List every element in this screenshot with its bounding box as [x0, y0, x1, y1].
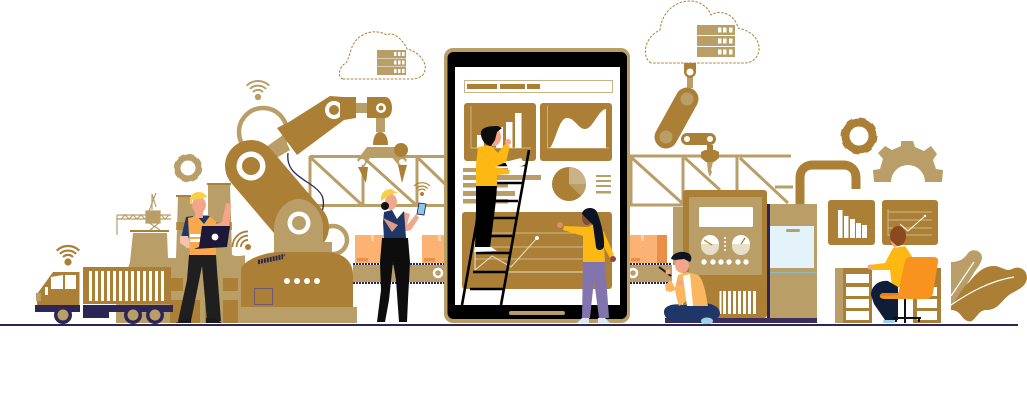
hand	[505, 139, 511, 145]
bar chart card	[464, 103, 536, 161]
ladder	[462, 150, 529, 305]
phone	[417, 203, 426, 215]
chair base	[893, 299, 921, 323]
server stack	[377, 50, 406, 75]
text lines left	[463, 168, 541, 204]
server stack	[697, 25, 735, 57]
tablet	[444, 48, 630, 323]
navy cable	[288, 153, 324, 212]
head	[890, 226, 906, 246]
shoulder joint	[274, 199, 332, 258]
search bar	[464, 80, 612, 92]
button row	[701, 259, 749, 265]
jacket	[665, 272, 708, 306]
icon: gear left	[175, 155, 201, 181]
icon: wifi beside robot	[229, 228, 258, 257]
icon: half gear tan	[873, 141, 943, 182]
sweater	[476, 144, 510, 186]
upper arm	[277, 96, 356, 155]
laptop	[194, 226, 230, 249]
shoe	[701, 318, 713, 324]
area chart card	[540, 103, 612, 161]
cabinet with pipe	[665, 165, 856, 323]
line chart panel	[882, 200, 938, 245]
delivery truck	[35, 267, 173, 324]
white gap under arm	[233, 233, 275, 256]
cloud right with server	[645, 1, 759, 63]
head	[675, 257, 689, 273]
head	[385, 194, 397, 210]
right truss frame	[630, 156, 793, 205]
trousers	[377, 238, 410, 322]
bar chart panel	[828, 200, 875, 245]
vent stripes	[720, 291, 756, 314]
shoe	[883, 320, 895, 323]
woman with phone	[377, 183, 430, 322]
robot arm	[233, 96, 357, 323]
ground line	[0, 324, 1018, 326]
hand	[868, 264, 872, 270]
control panel machine	[673, 190, 767, 318]
icon: wifi above phone	[414, 183, 430, 196]
sleeves and left arm	[181, 216, 195, 238]
truck chassis and wheels	[35, 305, 173, 324]
icon: wifi above truck	[57, 246, 79, 266]
top	[383, 210, 406, 238]
gauges	[701, 235, 750, 255]
legs	[178, 255, 221, 321]
trousers	[871, 281, 898, 320]
helmet	[381, 189, 399, 201]
shirt	[683, 274, 693, 306]
cloud left with server	[339, 32, 425, 79]
man at desk on chair	[868, 226, 938, 323]
clipboard	[505, 158, 525, 169]
pie chart	[552, 167, 586, 201]
head	[195, 208, 203, 218]
tower crane	[117, 193, 171, 235]
truck trailer	[83, 267, 171, 304]
lower arm	[236, 152, 303, 227]
vest	[188, 216, 216, 255]
left conveyor belt	[353, 264, 445, 283]
top	[563, 223, 614, 262]
worker with laptop	[176, 192, 231, 323]
tan rings behind arm	[239, 108, 347, 254]
robotic claw	[340, 97, 408, 183]
person on ladder	[474, 126, 525, 252]
sweater	[869, 246, 913, 287]
shoes	[577, 318, 589, 323]
desk with drawers	[835, 268, 941, 323]
head	[487, 128, 501, 146]
hands	[557, 222, 563, 228]
icon: gear dark	[842, 119, 876, 153]
truck cab	[36, 272, 80, 306]
man sitting on floor with phone	[659, 252, 720, 324]
girl pointing at chart	[557, 208, 616, 323]
chair	[880, 257, 938, 299]
shoe	[474, 247, 497, 252]
trousers	[475, 186, 497, 248]
helmet	[190, 192, 207, 204]
factory building with chimneys	[116, 183, 245, 323]
pie legend lines	[596, 175, 611, 194]
head and hair	[582, 211, 592, 225]
cardboard boxes on left conveyor	[355, 235, 444, 263]
legs	[664, 303, 720, 322]
left truss frame	[310, 156, 445, 206]
hanging robot arm	[660, 63, 719, 177]
robot base	[238, 252, 357, 323]
right conveyor belt with box	[629, 235, 672, 283]
arms	[384, 212, 410, 232]
tan elbow connector	[266, 135, 290, 160]
trousers	[582, 261, 609, 318]
raised arm	[214, 203, 231, 234]
plant leaves	[951, 250, 1027, 321]
hand and phone	[677, 280, 683, 286]
icon: wifi above robot	[247, 81, 269, 100]
line chart card	[462, 212, 612, 289]
